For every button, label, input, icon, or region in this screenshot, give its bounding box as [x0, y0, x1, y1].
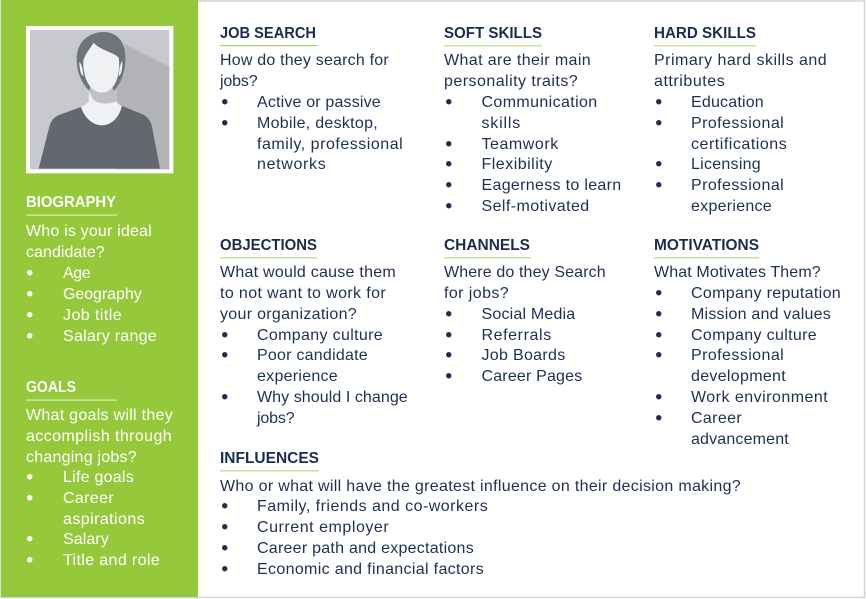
- text block: goals: Salary: [63, 531, 109, 548]
- text block: motivations: Professional: [691, 347, 784, 364]
- text block: hard skills: Education: [691, 94, 764, 111]
- text block: influences: [220, 478, 741, 580]
- text block: goals: changing jobs?: [26, 449, 137, 466]
- text block: goals: Life goals: [63, 469, 134, 486]
- text block: motivations: What Motivates Them?: [654, 264, 821, 281]
- text block: objections: •: [221, 324, 228, 346]
- text block: motivations: Work environment: [691, 389, 828, 406]
- text block: objections: Company culture: [257, 327, 383, 344]
- text block: job search: Active or passive: [257, 94, 381, 111]
- text block: biography: Job title: [63, 307, 122, 324]
- text block: biography: Salary range: [63, 328, 157, 345]
- text block: biography: •: [26, 326, 33, 348]
- text block: goals: Career: [63, 490, 114, 507]
- text block: hard skills: •: [655, 112, 662, 134]
- text block: influences: •: [221, 538, 228, 560]
- text block: goals: •: [26, 466, 33, 488]
- heading: channels: CHANNELS: [444, 237, 530, 254]
- text block: channels: Referrals: [482, 327, 552, 344]
- panel: job search: [219, 25, 403, 173]
- text block: hard skills: Licensing: [691, 156, 761, 173]
- text block: motivations: •: [655, 324, 662, 346]
- text block: soft skills: •: [445, 174, 452, 196]
- text block: goals: •: [26, 488, 33, 510]
- heading: objections: OBJECTIONS: [220, 237, 317, 254]
- text block: hard skills: Professional: [691, 115, 784, 132]
- text block: soft skills: •: [445, 134, 452, 156]
- text block: objections: Poor candidate: [257, 347, 368, 364]
- text block: motivations: Company reputation: [691, 285, 841, 302]
- text block: hard skills: certifications: [691, 136, 787, 153]
- text block: hard skills: Primary hard skills and: [654, 52, 827, 69]
- text block: job search: [219, 52, 403, 173]
- text block: motivations: Mission and values: [691, 306, 831, 323]
- panel: channels: [444, 237, 606, 388]
- heading: influences: INFLUENCES: [220, 450, 319, 467]
- text block: goals: accomplish through: [26, 428, 172, 445]
- text block: motivations: advancement: [691, 431, 789, 448]
- text block: goals: •: [26, 550, 33, 572]
- text block: motivations: Career: [691, 410, 742, 427]
- text block: channels: for jobs?: [444, 285, 509, 302]
- text block: biography: Age: [63, 265, 91, 282]
- heading: job search: JOB SEARCH: [220, 25, 316, 42]
- text block: motivations: •: [655, 386, 662, 408]
- text block: biography: Geography: [63, 286, 142, 303]
- text block: goals: What goals will they: [26, 407, 173, 424]
- text block: motivations: [654, 264, 841, 448]
- text block: biography: [26, 223, 157, 348]
- text block: biography: •: [26, 284, 33, 306]
- text block: job search: •: [221, 92, 228, 114]
- text block: goals: [26, 407, 173, 572]
- text block: job search: networks: [257, 156, 326, 173]
- text block: motivations: •: [655, 408, 662, 430]
- text block: biography: •: [26, 304, 33, 326]
- text block: objections: •: [221, 344, 228, 366]
- text block: soft skills: Teamwork: [482, 136, 559, 153]
- text block: goals: aspirations: [63, 511, 145, 528]
- heading: biography: BIOGRAPHY: [26, 194, 117, 211]
- text block: soft skills: Self-motivated: [482, 198, 590, 215]
- text block: objections: to not want to work for: [220, 285, 386, 302]
- heading: goals: GOALS: [26, 379, 76, 396]
- text block: soft skills: skills: [482, 115, 520, 132]
- text block: motivations: •: [655, 304, 662, 326]
- text block: influences: •: [221, 496, 228, 518]
- text block: influences: Career path and expectations: [257, 540, 474, 557]
- text block: job search: How do they search for: [220, 52, 389, 69]
- text block: soft skills: •: [445, 92, 452, 114]
- text block: objections: experience: [257, 368, 338, 385]
- text block: soft skills: Flexibility: [482, 156, 552, 173]
- text block: objections: Why should I change: [257, 389, 408, 406]
- text block: soft skills: personality traits?: [444, 73, 578, 90]
- text block: biography: candidate?: [26, 244, 105, 261]
- text block: channels: Social Media: [482, 306, 576, 323]
- text block: channels: •: [445, 366, 452, 388]
- text block: influences: Family, friends and co-workers: [257, 498, 488, 515]
- text block: objections: your organization?: [220, 306, 357, 323]
- panel: objections: [220, 237, 408, 427]
- text block: soft skills: •: [445, 196, 452, 218]
- text block: channels: •: [445, 344, 452, 366]
- panel: soft skills: [444, 25, 622, 218]
- text block: hard skills: •: [655, 174, 662, 196]
- text block: objections: •: [221, 386, 228, 408]
- text block: job search: family, professional: [257, 136, 403, 153]
- text block: influences: Economic and financial factors: [257, 561, 484, 578]
- text block: hard skills: experience: [691, 198, 772, 215]
- text block: hard skills: attributes: [654, 73, 725, 90]
- text block: soft skills: [444, 52, 622, 218]
- text block: channels: •: [445, 324, 452, 346]
- text block: channels: Job Boards: [482, 347, 566, 364]
- text block: job search: jobs?: [219, 73, 258, 90]
- text block: motivations: •: [655, 344, 662, 366]
- panel: influences: [220, 450, 741, 580]
- icon: candidate portrait: [26, 26, 173, 173]
- text block: channels: Career Pages: [482, 368, 582, 385]
- heading: soft skills: SOFT SKILLS: [444, 25, 542, 42]
- text block: biography: •: [26, 262, 33, 284]
- text block: goals: •: [26, 528, 33, 550]
- text block: hard skills: [654, 52, 827, 215]
- text block: soft skills: Communication: [482, 94, 598, 111]
- text block: motivations: Company culture: [691, 327, 817, 344]
- text block: influences: Who or what will have the greatest influence on their decision making?: [220, 478, 741, 495]
- panel: motivations: [654, 237, 841, 448]
- text block: objections: What would cause them: [220, 264, 396, 281]
- text block: hard skills: •: [655, 92, 662, 114]
- text block: soft skills: •: [445, 154, 452, 176]
- text block: biography: Who is your ideal: [26, 223, 152, 240]
- panel: green sidebar: [1, 0, 198, 597]
- text block: motivations: •: [655, 282, 662, 304]
- text block: influences: •: [221, 558, 228, 580]
- text block: job search: Mobile, desktop,: [257, 115, 378, 132]
- text block: influences: Current employer: [257, 519, 389, 536]
- text block: hard skills: Professional: [691, 177, 784, 194]
- text block: channels: •: [445, 304, 452, 326]
- heading: motivations: MOTIVATIONS: [654, 237, 759, 254]
- text block: objections: [220, 264, 408, 427]
- heading: hard skills: HARD SKILLS: [654, 25, 756, 42]
- text block: soft skills: What are their main: [444, 52, 591, 69]
- text block: motivations: development: [691, 368, 786, 385]
- text block: influences: •: [221, 516, 228, 538]
- text block: objections: jobs?: [256, 410, 295, 427]
- text block: soft skills: Eagerness to learn: [482, 177, 622, 194]
- text block: channels: Where do they Search: [444, 264, 606, 281]
- text block: channels: [444, 264, 606, 388]
- text block: job search: •: [221, 112, 228, 134]
- text block: goals: Title and role: [63, 552, 160, 569]
- text block: hard skills: •: [655, 154, 662, 176]
- panel: hard skills: [654, 25, 827, 215]
